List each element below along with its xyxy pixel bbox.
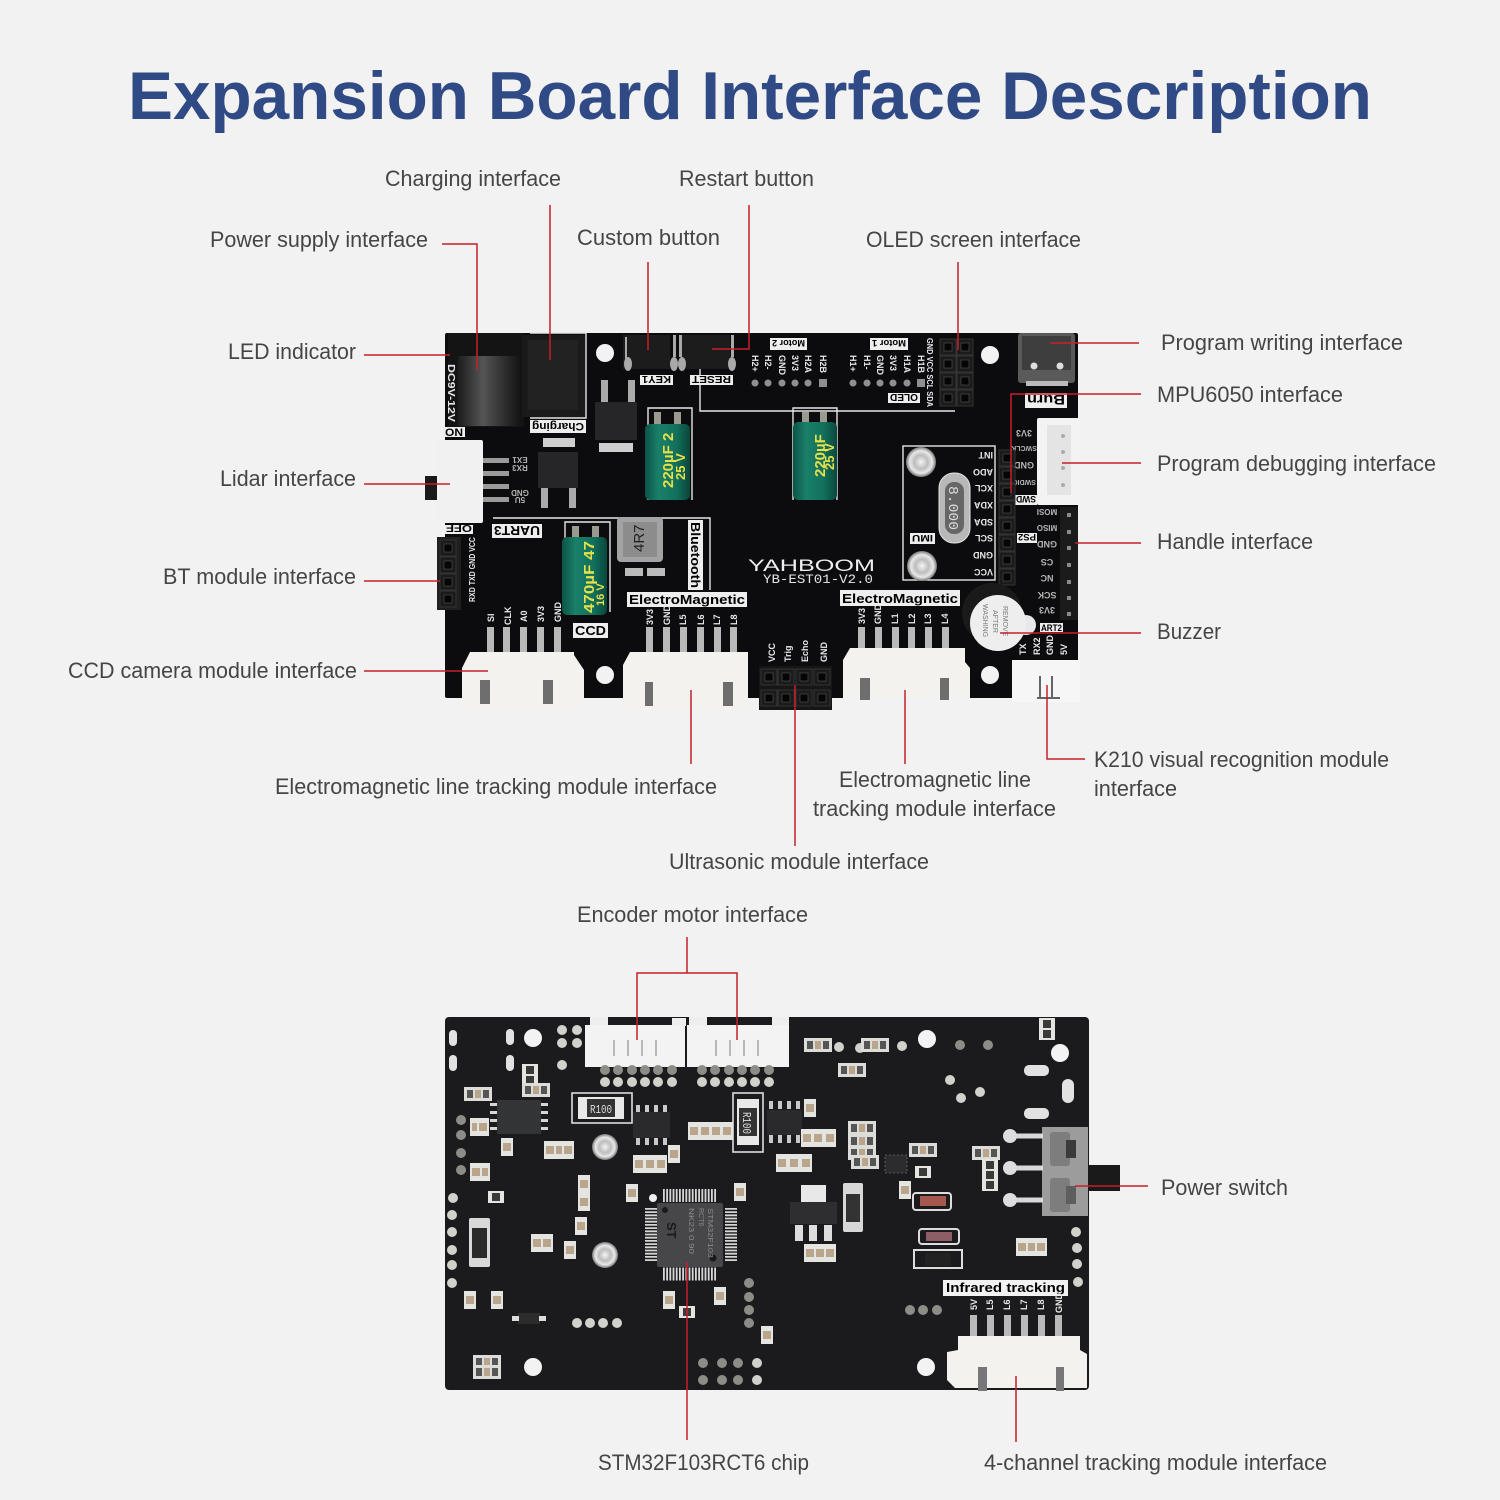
callout labels	[68, 166, 1436, 1475]
pin labels: XDA	[973, 500, 993, 510]
pin labels: tracking connector: 5V	[969, 1299, 979, 1310]
connector: electromagnetic right	[843, 627, 970, 700]
R100 resistor left: R100	[590, 1103, 612, 1117]
pin labels: 3V3	[1016, 428, 1032, 438]
callout labels: K210 visual recognition module	[1094, 747, 1389, 772]
pin labels: tracking connector: GND	[1054, 1292, 1064, 1313]
pin labels: L5	[678, 614, 688, 625]
pin labels: L3	[923, 613, 933, 624]
pin labels: NC	[1040, 573, 1054, 583]
buzzer	[962, 583, 1036, 651]
connector J12	[672, 1017, 789, 1067]
silk labels	[443, 338, 1067, 638]
pin labels: MISO	[1037, 523, 1057, 532]
USB-C burn port	[1018, 333, 1075, 386]
power switch	[1003, 1127, 1120, 1216]
pin labels: 3V3	[645, 609, 655, 625]
pin labels: GND	[875, 355, 885, 376]
pin labels: SI	[486, 613, 496, 622]
pin labels: GND	[511, 488, 529, 497]
pin labels: H1B	[916, 355, 926, 374]
diodes and regulator	[469, 1183, 962, 1324]
MPU header	[999, 450, 1015, 585]
silk labels: Charging	[532, 420, 584, 432]
buzzer: AFTER	[991, 610, 998, 633]
pin labels: CS	[1041, 557, 1053, 567]
pin labels: GND	[662, 604, 672, 625]
IMU standoffs and crystal: 8.000	[944, 486, 960, 530]
callout labels: Handle interface	[1157, 529, 1313, 554]
pin labels: 3V3	[536, 606, 546, 622]
pin labels: 3V3	[1039, 605, 1055, 615]
pin labels: SDA	[973, 517, 993, 527]
pin labels: Echo	[800, 639, 810, 662]
silk labels: CCD	[575, 623, 606, 638]
capacitor: 470uF: 470µF 47	[581, 541, 598, 613]
Infrared tracking label: Infrared tracking	[946, 1280, 1065, 1295]
pin labels: tracking connector: L5	[985, 1299, 995, 1310]
icon: power jack	[448, 333, 524, 427]
callout labels: Buzzer	[1157, 619, 1221, 644]
callout labels: Charging interface	[385, 166, 561, 191]
pin labels: H1-	[862, 355, 872, 370]
logo: YAHBOOM	[748, 556, 875, 587]
pin labels	[468, 338, 1069, 662]
soldered slots	[449, 1029, 1074, 1119]
callout labels: Program writing interface	[1161, 330, 1403, 355]
pin labels: tracking connector	[969, 1292, 1064, 1313]
pin labels: 3V3	[790, 355, 800, 371]
buzzer: REMOVE	[1001, 606, 1008, 637]
callout labels: MPU6050 interface	[1157, 382, 1343, 407]
pin labels: Trig	[783, 645, 793, 662]
capacitor: 470uF: 16 V	[595, 583, 607, 606]
pin labels: L2	[907, 613, 917, 624]
pin labels: 3V3	[857, 608, 867, 624]
connector: CCD	[462, 627, 584, 710]
callout labels: LED indicator	[228, 339, 356, 364]
callout labels: Restart button	[679, 166, 814, 191]
pin labels: H2+	[750, 355, 760, 372]
silk labels: Motor 2	[772, 338, 805, 348]
callout labels: BT module interface	[163, 564, 356, 589]
pin labels: GND	[1036, 539, 1057, 549]
pin labels: 3V3	[888, 355, 898, 371]
BT header	[437, 537, 461, 610]
SWD connector	[1037, 418, 1082, 505]
capacitor: 220uF left: 220µF 2	[660, 433, 677, 488]
pin labels: GND	[777, 355, 787, 376]
pin labels: GND	[1045, 634, 1055, 655]
pin labels: GND	[972, 550, 993, 560]
pin labels: SWDIO	[1012, 478, 1036, 485]
main chip STM32F103RCT6: STM32F103	[706, 1208, 713, 1258]
silk labels: DC9V-12V	[445, 364, 456, 422]
PS2 header	[1060, 507, 1078, 620]
main chip STM32F103RCT6: RCT6	[697, 1208, 704, 1226]
ultrasonic header	[759, 666, 832, 710]
connector pads	[447, 1025, 1083, 1385]
pin labels: SCL	[974, 533, 993, 543]
pin labels: L1	[890, 613, 900, 624]
callout labels: Power supply interface	[210, 227, 428, 252]
title: Expansion Board Interface Description	[128, 58, 1372, 134]
metal standoffs	[592, 1134, 618, 1268]
connector: 4-channel tracking	[947, 1315, 1087, 1391]
callout labels: Encoder motor interface	[577, 902, 808, 927]
pin labels: TX	[1018, 643, 1028, 655]
panel: top board	[425, 333, 1082, 710]
icon: charging jack	[522, 335, 585, 417]
silk labels: IMU	[912, 533, 933, 543]
callout labels: Ultrasonic module interface	[669, 849, 929, 874]
pin labels: tracking connector: L6	[1002, 1299, 1012, 1310]
pin labels: tracking connector: L7	[1019, 1299, 1029, 1310]
K210 connector	[1012, 660, 1080, 702]
silk labels: ART2	[1041, 623, 1062, 633]
silk labels: ON	[445, 427, 463, 439]
callout labels: interface	[1094, 776, 1177, 801]
pin labels: H1A	[902, 355, 912, 374]
pin labels: L7	[712, 614, 722, 625]
buzzer: WASHING	[981, 604, 988, 637]
pin labels: A0	[519, 610, 529, 622]
SMD components	[464, 1018, 1055, 1379]
lidar connector and switch nub	[425, 440, 509, 523]
capacitor: 220uF right	[793, 412, 837, 500]
R100 resistor left	[572, 1093, 632, 1123]
icon: key and reset buttons	[623, 335, 736, 371]
mounting holes	[524, 1029, 1069, 1376]
main chip STM32F103RCT6: NK23 0 90	[687, 1208, 694, 1254]
callout labels: CCD camera module interface	[68, 658, 357, 683]
pin labels: GND	[819, 642, 829, 662]
silk labels: Bluetooth	[688, 522, 703, 588]
pin labels: GND	[873, 604, 883, 624]
silkscreen outlines	[493, 333, 995, 612]
mounting holes	[596, 344, 999, 684]
inductor 4R7: 4R7	[631, 524, 648, 552]
connector J9	[585, 1017, 685, 1067]
silk labels: UART3	[494, 523, 540, 538]
silk labels: RESET	[692, 373, 731, 384]
pin labels: H1+	[848, 355, 858, 372]
pin labels: XCL	[974, 483, 993, 493]
pin labels: INT	[978, 450, 993, 460]
R100 resistor right	[733, 1093, 763, 1152]
callout labels: Lidar interface	[220, 466, 356, 491]
panel: bottom board	[445, 1017, 1120, 1391]
silk labels: PS2	[1018, 532, 1036, 542]
main chip STM32F103RCT6	[649, 1194, 731, 1274]
callout labels: 4-channel tracking module interface	[984, 1450, 1327, 1475]
callout labels: Electromagnetic line	[839, 767, 1031, 792]
pin labels: MOSI	[1037, 507, 1057, 516]
pin labels: SCK	[1037, 590, 1057, 600]
inductor 4R7	[617, 517, 665, 576]
OLED header	[940, 339, 973, 406]
pin labels: RX2	[1032, 637, 1042, 655]
capacitor: 220uF left: 25 V	[673, 453, 688, 480]
capacitor: 220uF left	[645, 412, 690, 500]
silk labels: SWD	[1016, 494, 1036, 504]
pin labels: VCC	[767, 642, 777, 662]
icon: regulators	[538, 380, 637, 508]
pin labels: GND VCC SCL SDA	[925, 338, 934, 407]
pin labels: GND	[1014, 460, 1034, 470]
pin labels: H2-	[763, 355, 773, 370]
silk labels: OFF	[446, 522, 472, 533]
silk labels: Motor 1	[872, 338, 906, 348]
silk labels: KEY1	[642, 373, 671, 384]
pin labels: RX3	[512, 463, 528, 472]
connector: electromagnetic left	[623, 627, 748, 710]
logo: YAHBOOM: YB-EST01-V2.0	[763, 572, 873, 587]
pin labels: ADO	[973, 467, 993, 477]
pin labels: EX1	[512, 455, 528, 464]
small ICs	[490, 1100, 907, 1173]
pin labels: CLK	[503, 606, 513, 625]
silk labels: ElectroMagnetic	[629, 592, 745, 607]
pin labels: L8	[729, 614, 739, 625]
logo: YAHBOOM: YAHBOOM	[748, 556, 875, 575]
callout labels: Custom button	[577, 225, 720, 250]
callout labels: Electromagnetic line tracking module interface	[275, 774, 717, 799]
pin labels: 5U	[515, 495, 525, 504]
callout labels: Power switch	[1161, 1175, 1288, 1200]
pin labels: H2A	[803, 355, 813, 374]
capacitor: 220uF right: 220µF	[812, 434, 829, 477]
pin labels: VCC	[973, 567, 993, 577]
pin labels: H2B	[818, 355, 828, 374]
callout labels: OLED screen interface	[866, 227, 1081, 252]
pin labels: GND	[553, 602, 563, 622]
callout labels: STM32F103RCT6 chip	[598, 1450, 809, 1475]
IMU standoffs and crystal	[906, 447, 970, 581]
pin labels: SWCLK	[1011, 444, 1037, 451]
main chip STM32F103RCT6: ST	[664, 1222, 679, 1239]
capacitor: 220uF right: 25 V	[822, 443, 837, 470]
callout labels: Program debugging interface	[1157, 451, 1436, 476]
pin labels: tracking connector: L8	[1036, 1299, 1046, 1310]
pin labels: 5V	[1059, 644, 1069, 655]
R100 resistor right: R100	[739, 1112, 753, 1134]
callout lines	[364, 205, 1148, 1442]
silk labels: OLED	[890, 391, 918, 402]
motor pads	[752, 379, 925, 387]
pin labels: L6	[696, 614, 706, 625]
callout labels: tracking module interface	[813, 796, 1056, 821]
pin labels: RXD TXD GND VCC	[468, 537, 477, 602]
capacitor: 470uF	[562, 526, 607, 615]
pin labels: L4	[940, 613, 950, 624]
silk labels: Burn	[1027, 392, 1065, 408]
silk labels: ElectroMagnetic	[842, 591, 958, 606]
